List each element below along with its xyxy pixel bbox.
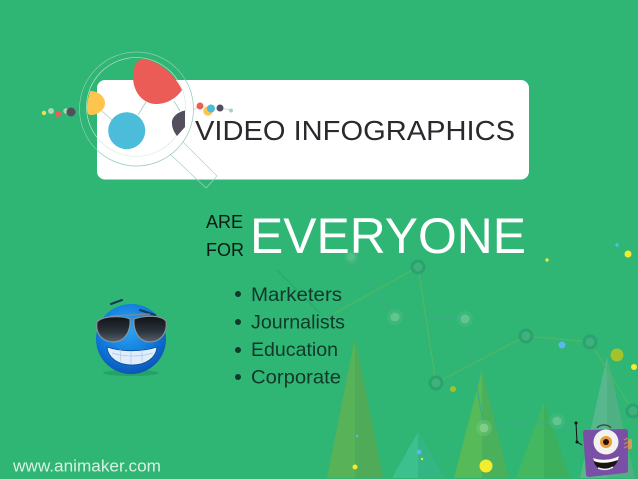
audience list: Education — [251, 339, 338, 361]
heading: are for: ARE — [206, 211, 243, 232]
heading: video infographics: VIDEO INFOGRAPHICS — [195, 115, 515, 146]
scattered dots — [352, 243, 637, 472]
heading: are for — [206, 211, 244, 260]
icon: blue smiley with sunglasses — [96, 300, 166, 376]
panel: title card — [97, 80, 529, 180]
icon: purple one-eyed mascot — [574, 422, 632, 477]
audience list — [235, 284, 345, 388]
heading: are for: FOR — [206, 239, 244, 260]
background triangles — [327, 338, 635, 478]
right bubble trail — [193, 102, 233, 116]
audience list: Journalists — [251, 312, 345, 334]
audience list: Marketers — [251, 284, 342, 306]
left bubble trail — [42, 108, 76, 117]
website url: www.animaker.com — [12, 458, 161, 476]
heading: everyone: EVERYONE — [250, 208, 526, 264]
constellation network — [277, 250, 638, 438]
audience list: Corporate — [251, 366, 341, 388]
icon: magnifying glass — [80, 52, 217, 188]
